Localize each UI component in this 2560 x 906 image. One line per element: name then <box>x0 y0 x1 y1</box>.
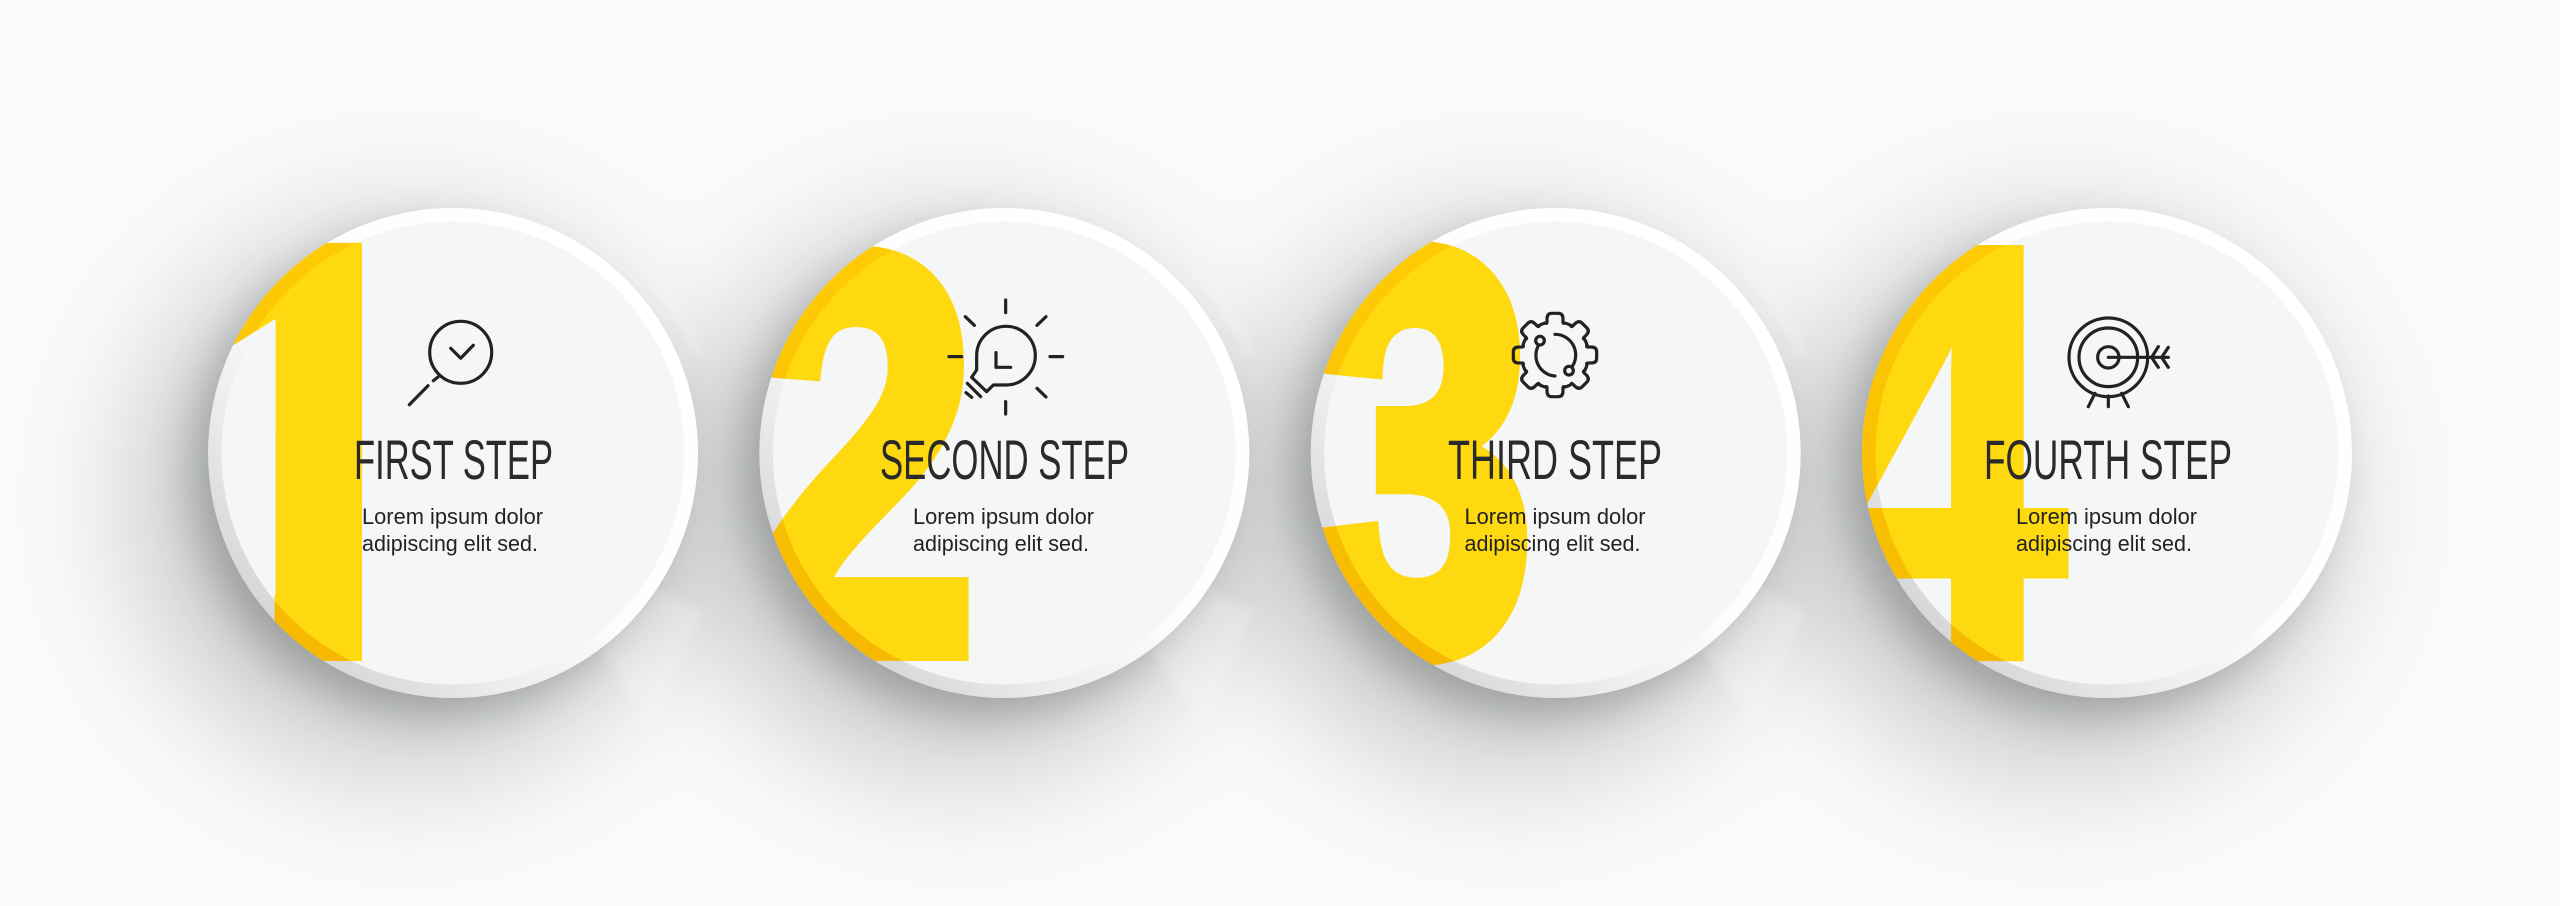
description: Lorem ipsum dolor <box>2016 504 2197 529</box>
description: Lorem ipsum dolor <box>362 504 543 529</box>
big numeral 4: 4 <box>1795 122 2070 781</box>
description: Lorem ipsum dolor <box>913 504 1094 529</box>
icon: light bulb with clock <box>949 300 1063 414</box>
soft drop shadows <box>123 213 2347 783</box>
description <box>1464 504 1646 556</box>
big numeral 2: 2 <box>735 139 978 772</box>
heading: FOURTH STEP <box>1984 428 2232 491</box>
description: adipiscing elit sed. <box>2016 531 2192 556</box>
big numeral 4 <box>1862 245 2068 662</box>
big numeral 1: 1 <box>137 114 472 787</box>
icon: target with arrow <box>2069 318 2168 407</box>
icon: gear <box>1513 313 1597 397</box>
circle disc <box>208 208 698 698</box>
big numeral 3: 3 <box>1303 136 1533 767</box>
description: Lorem ipsum dolor <box>1464 504 1646 529</box>
circle disc <box>1311 208 1801 698</box>
description: adipiscing elit sed. <box>1464 531 1640 556</box>
big numeral 3: 3 <box>1303 136 1533 767</box>
heading: THIRD STEP <box>1448 428 1662 491</box>
big numeral 2 <box>771 246 969 661</box>
big numeral 1: 1 <box>137 114 472 787</box>
heading: SECOND STEP <box>880 428 1129 491</box>
big numeral 3 <box>1322 242 1528 666</box>
description: adipiscing elit sed. <box>362 531 538 556</box>
panel: third step <box>1310 208 1801 698</box>
big numeral 1 <box>232 242 362 661</box>
description <box>362 504 543 556</box>
light reflections between circles <box>600 262 1805 730</box>
description: adipiscing elit sed. <box>913 531 1089 556</box>
panel: first step <box>208 208 698 698</box>
circle disc <box>759 208 1249 698</box>
big numeral 4: 4 <box>1795 122 2070 781</box>
panel: second step <box>759 208 1250 698</box>
panel: fourth step <box>1862 208 2352 698</box>
circle disc <box>1862 208 2352 698</box>
heading: FIRST STEP <box>354 428 553 491</box>
description <box>913 504 1094 556</box>
big numeral 2: 2 <box>735 139 978 772</box>
description <box>2016 504 2197 556</box>
icon: magnifier with check <box>409 321 492 405</box>
